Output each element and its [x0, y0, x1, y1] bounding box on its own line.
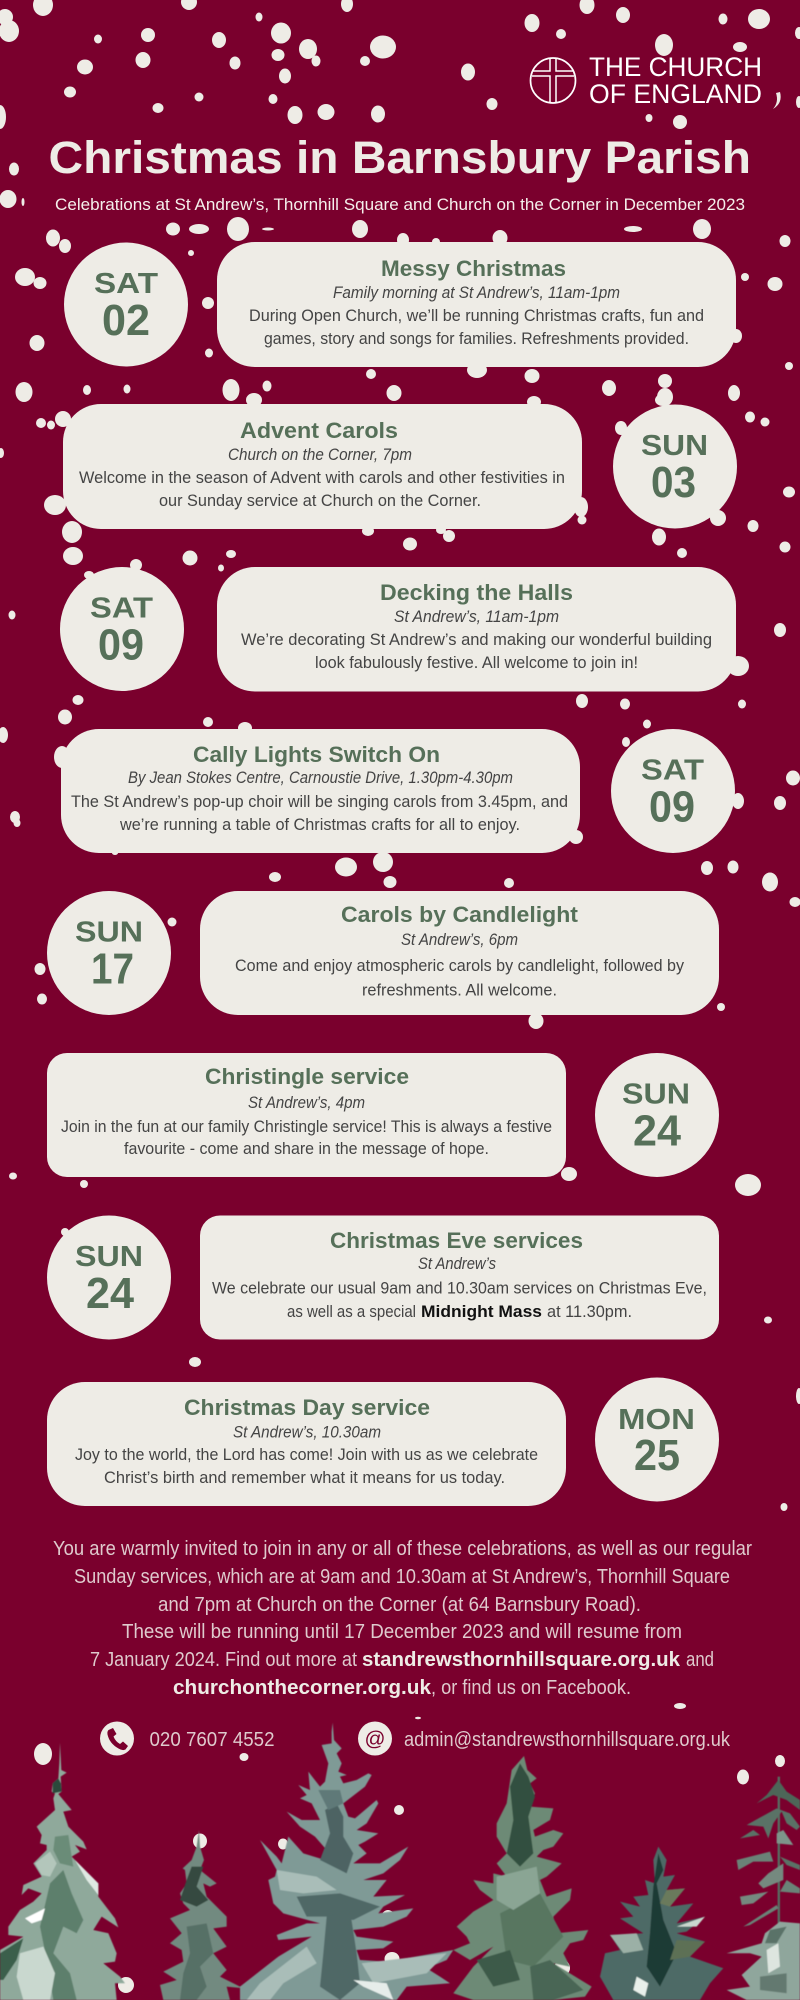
card: Christmas Eve services: St Andrew’s: [418, 1255, 496, 1273]
logo wordmark: OF ENGLAND: [589, 79, 762, 109]
date badge: SUN 24: SUN: [75, 1241, 143, 1273]
invitation text block: and: [686, 1649, 714, 1671]
card: Cally Lights Switch On: Cally Lights Switch On: [193, 742, 440, 767]
card: Christmas Eve services: as well as a special: [287, 1302, 416, 1321]
date badge: SUN 24: [47, 1216, 171, 1340]
card: Messy Christmas: [217, 242, 736, 367]
tree 4: [453, 1756, 592, 2000]
card: Christmas Eve services: [200, 1216, 719, 1340]
card: Advent Carols: [63, 404, 582, 529]
card: Decking the Halls: [217, 567, 736, 692]
date badge: SAT 02: SAT: [94, 268, 158, 300]
event row: Christingle service: [47, 1053, 719, 1177]
card: Christingle service: Join in the fun at our family Christingle service! This is always a festive: [61, 1117, 552, 1136]
date badge: SAT 09: 09: [98, 620, 144, 670]
tree 6: [727, 1777, 800, 2000]
card: Decking the Halls: St Andrew’s, 11am-1pm: [394, 608, 559, 626]
card: Messy Christmas: Messy Christmas: [381, 256, 566, 281]
date badge: SUN 24: SUN: [622, 1078, 690, 1110]
date badge: SUN 17: SUN: [75, 916, 143, 948]
event row: Christmas Day service: [47, 1378, 719, 1506]
card: Advent Carols: Church on the Corner, 7pm: [228, 446, 412, 464]
card: Christingle service: favourite - come and share in the message of hope.: [124, 1139, 489, 1158]
date badge: SAT 09: SAT: [641, 754, 704, 786]
event row: Cally Lights Switch On: [61, 729, 735, 853]
card: Carols by Candlelight: refreshments. All welcome.: [362, 980, 557, 1000]
card: Advent Carols: our Sunday service at Church on the Corner.: [159, 491, 481, 510]
icon: at sign: [358, 1722, 392, 1756]
tree 3: [240, 1723, 453, 2000]
card: Cally Lights Switch On: we’re running a table of Christmas crafts for all to enjoy.: [119, 815, 520, 834]
icon: at sign: @: [364, 1728, 386, 1750]
date badge: SAT 02: [64, 242, 188, 366]
invitation text block: You are warmly invited to join in any or all of these celebrations, as well as our regular: [53, 1538, 752, 1560]
date badge: MON 25: MON: [618, 1404, 695, 1436]
date badge: SAT 02: 02: [102, 296, 150, 345]
date badge: SUN 24: 24: [633, 1106, 682, 1156]
card: Decking the Halls: We’re decorating St Andrew’s and making our wonderful building: [241, 630, 712, 649]
logo wordmark: THE CHURCH: [589, 52, 762, 82]
card: Christmas Eve services: We celebrate our usual 9am and 10.30am services on Christmas Eve,: [212, 1278, 707, 1298]
card: Carols by Candlelight: [200, 891, 719, 1015]
card: Advent Carols: Advent Carols: [240, 418, 398, 443]
subtitle: Celebrations at St Andrew’s, Thornhill Square and Church on the Corner in December 2023: [55, 196, 745, 214]
date badge: SUN 03: 03: [651, 458, 696, 507]
card: Cally Lights Switch On: By Jean Stokes Centre, Carnoustie Drive, 1.30pm-4.30pm: [128, 769, 513, 787]
card: Christingle service: [47, 1053, 566, 1177]
invitation text block: Sunday services, which are at 9am and 10.30am at St Andrew’s, Thornhill Square: [74, 1566, 730, 1588]
icon: cross in circle: [530, 58, 576, 103]
tree 1: [0, 1743, 125, 2000]
date badge: SUN 03: SUN: [641, 430, 708, 462]
contact: phone: [100, 1722, 274, 1756]
card: Christmas Eve services: Christmas Eve services: [330, 1228, 583, 1253]
card: Messy Christmas: games, story and songs for families. Refreshments provided.: [264, 329, 689, 348]
logo: The Church of England: [530, 52, 762, 109]
date badge: SUN 17: 17: [91, 944, 134, 994]
date badge: SAT 09: [611, 729, 735, 853]
phone number: 020 7607 4552: [150, 1729, 274, 1751]
card: Carols by Candlelight: Come and enjoy atmospheric carols by candlelight, followed by: [235, 956, 684, 975]
card: Advent Carols: Welcome in the season of Advent with carols and other festivities in: [79, 468, 565, 487]
event row: Carols by Candlelight: [47, 891, 719, 1015]
tree 5: [600, 1847, 723, 2000]
card: Cally Lights Switch On: The St Andrew’s pop-up choir will be singing carols from 3.45pm, and: [71, 792, 568, 811]
invitation text block: 7 January 2024. Find out more at: [90, 1649, 357, 1671]
card: Christmas Day service: Christmas Day service: [184, 1395, 430, 1420]
invitation text block: churchonthecorner.org.uk: [173, 1677, 432, 1699]
trees illustration: [0, 1723, 800, 2000]
email address: admin@standrewsthornhillsquare.org.uk: [404, 1729, 731, 1751]
date badge: SAT 09: SAT: [90, 592, 153, 624]
title: Christmas in Barnsbury Parish: [48, 132, 751, 183]
event row: Decking the Halls: [60, 567, 736, 692]
invitation text block: [53, 1538, 752, 1699]
card: Christingle service: St Andrew’s, 4pm: [248, 1094, 365, 1112]
invitation text block: , or find us on Facebook.: [431, 1677, 631, 1699]
card: Messy Christmas: During Open Church, we’ll be running Christmas crafts, fun and: [249, 306, 704, 325]
date badge: SAT 09: 09: [649, 782, 695, 832]
date badge: SUN 17: [47, 891, 171, 1015]
event row: Christmas Eve services: [47, 1216, 719, 1340]
card: Cally Lights Switch On: [61, 729, 580, 853]
date badge: SAT 09: [60, 567, 184, 691]
invitation text block: and 7pm at Church on the Corner (at 64 Barnsbury Road).: [158, 1594, 641, 1616]
tree 2: [160, 1830, 243, 2000]
date badge: MON 25: 25: [634, 1431, 680, 1480]
date badge: SUN 24: [595, 1053, 719, 1177]
card: Christmas Day service: Christ’s birth and remember what it means for us today.: [104, 1468, 505, 1487]
contact: email: [358, 1722, 731, 1756]
icon: phone: [100, 1722, 134, 1756]
card: Messy Christmas: Family morning at St Andrew’s, 11am-1pm: [333, 284, 620, 302]
event row: Advent Carols: [63, 404, 737, 529]
invitation text block: standrewsthornhillsquare.org.uk: [362, 1649, 681, 1671]
snow crescent near logo: [773, 92, 781, 109]
date badge: SUN 03: [613, 404, 737, 528]
card: Decking the Halls: Decking the Halls: [380, 580, 573, 605]
date badge: SUN 24: 24: [86, 1269, 135, 1318]
card: Christmas Eve services: at 11.30pm.: [547, 1302, 632, 1321]
date badge: MON 25: [595, 1378, 719, 1502]
invitation text block: These will be running until 17 December 2023 and will resume from: [122, 1621, 682, 1643]
card: Christmas Day service: St Andrew’s, 10.30am: [233, 1424, 381, 1442]
logo wordmark: [589, 52, 762, 109]
card: Carols by Candlelight: St Andrew’s, 6pm: [401, 931, 518, 949]
card: Carols by Candlelight: Carols by Candlelight: [341, 902, 579, 927]
card: Christmas Day service: Joy to the world, the Lord has come! Join with us as we celebrate: [75, 1445, 538, 1464]
card: Christmas Day service: [47, 1382, 566, 1506]
card: Decking the Halls: look fabulously festive. All welcome to join in!: [315, 653, 638, 672]
event row: Messy Christmas: [64, 242, 736, 367]
card: Christmas Eve services: Midnight Mass: [421, 1302, 542, 1321]
card: Christingle service: Christingle service: [205, 1064, 409, 1089]
